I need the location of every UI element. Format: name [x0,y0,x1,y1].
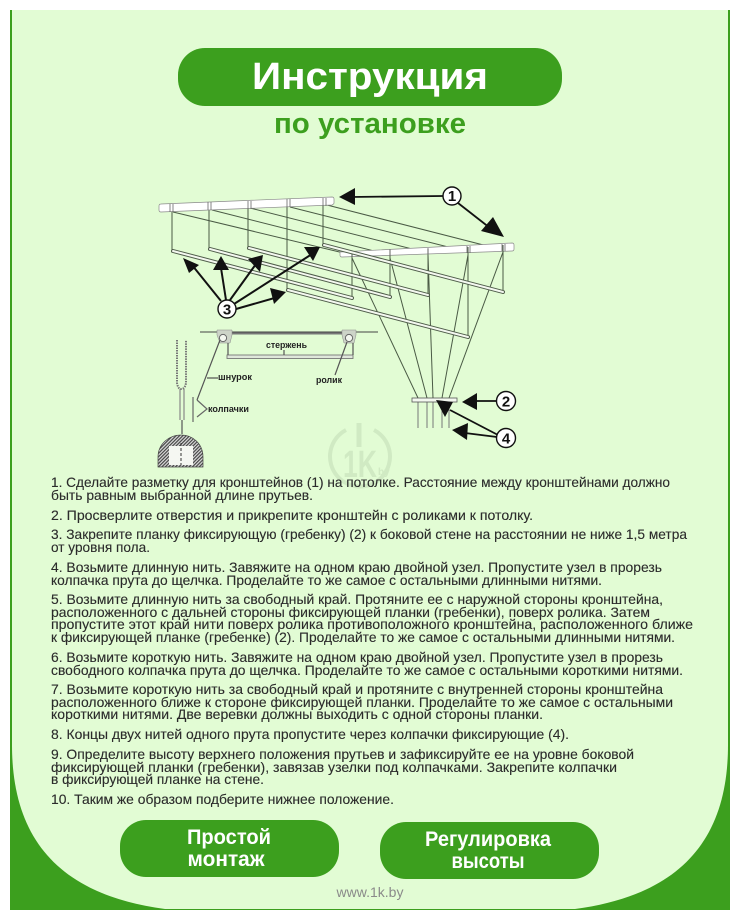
label: caps: колпачки [208,404,249,415]
title pill [178,48,562,106]
button: simple mounting [120,820,339,877]
label: cord: шнурок [218,372,252,383]
watermark logo: 1K [343,444,377,486]
callout 1 with arrows [339,187,504,237]
instructions text block: 10. Таким же образом подберите нижнее положение. [51,791,394,807]
instructions text block: колпачка прута до щелчка. Проделайте то же самое с остальными длинными нитями. [51,572,602,588]
instructions text block: расположенного ближе к стороне фиксирующей планки. Проделайте то же самое с остальными [51,694,673,710]
button: height adjustment: высоты [452,850,524,873]
instructions text block: 7. Возьмите короткую нить за свободный край и протяните с внутренней стороны кронштейна [51,681,663,697]
button: simple mounting: монтаж [188,848,266,871]
detail diagram: rod and rollers [193,330,378,422]
main dryer diagram [159,197,514,428]
instructions text block: в фиксирующей планке на стене. [51,771,264,787]
instructions text block: 4. Возьмите длинную нить. Завяжите на одном краю двойной узел. Пропустите узел в прорезь [51,559,662,575]
watermark logo: by [378,467,390,478]
instructions text block: быть равным выбранной длине прутьев. [51,487,313,503]
button: simple mounting: Простой [187,826,271,849]
instructions text block [51,474,693,807]
right bracket drops and fan wires [352,245,503,398]
instructions text block: 6. Возьмите короткую нить. Завяжите на одном краю двойной узел. Пропустите узел в прорезь [51,649,663,665]
watermark logo [330,423,390,487]
subtitle: по установке [274,108,466,140]
instructions text block: расположенного с дальней стороны фиксирующей планки (гребенки), поверх ролика. Затем [51,604,650,620]
instructions text block: 9. Определите высоту верхнего положения прутьев и зафиксируйте ее на уровне боковой [51,746,634,762]
rods [173,245,503,337]
callout 1 with arrows: 1 [448,188,456,205]
callout 2 with arrow: 2 [502,394,510,410]
instructions text block: 2. Просверлите отверстия и прикрепите кронштейн с роликами к потолку. [51,507,533,523]
bracket ticks [170,198,505,256]
callout 3 with arrows [183,247,320,318]
callout 3 with arrows: 3 [223,302,231,318]
detail diagram: cap cross-section [158,340,203,467]
callout 4 with arrows [436,400,516,448]
instructions text block: короткими нитями. Две веревки должны выходить с одной стороны планки. [51,706,543,722]
instructions text block: 3. Закрепите планку фиксирующую (гребенку) (2) к боковой стене на расстоянии не ниже 1,5 метра [51,526,687,542]
instructions text block: фиксирующей планки (гребенки), завязав узелки под колпачками. Закрепите колпачки [51,759,617,775]
cap bracket [193,397,207,422]
button: height adjustment [380,822,599,879]
instructions text block: свободного колпачка прута до щелчка. Проделайте то же самое с остальными короткими нитями. [51,662,683,678]
website url: www.1k.by [336,884,403,900]
instructions text block: 8. Концы двух нитей одного прута пропустите через колпачки фиксирующие (4). [51,726,569,742]
label: roller: ролик [316,375,342,386]
instructions text block: от уровня пола. [51,539,150,555]
callout 4 with arrows: 4 [502,430,511,448]
instructions text block: к фиксирующей планке (гребенке) (2). Проделайте то же самое с остальными длинными нитями. [51,629,675,645]
instructions text block: 5. Возьмите длинную нить за свободный край. Протяните ее с наружной стороны кронштейна, [51,591,663,607]
button: height adjustment: Регулировка [425,828,551,851]
instructions text block: пропустите этот край нити поверх ролика противоположного кронштейна, расположенного ближе [51,616,693,632]
callout 2 with arrow [462,392,516,410]
wires between brackets [172,199,503,289]
fixing plank with thread ends [412,398,457,428]
right ceiling bracket [340,243,514,257]
title pill: Инструкция [252,56,488,98]
left ceiling bracket [159,197,334,212]
label: rod: стержень [266,340,307,351]
instructions text block: 1. Сделайте разметку для кронштейнов (1) на потолке. Расстояние между кронштейнами должно [51,474,670,490]
